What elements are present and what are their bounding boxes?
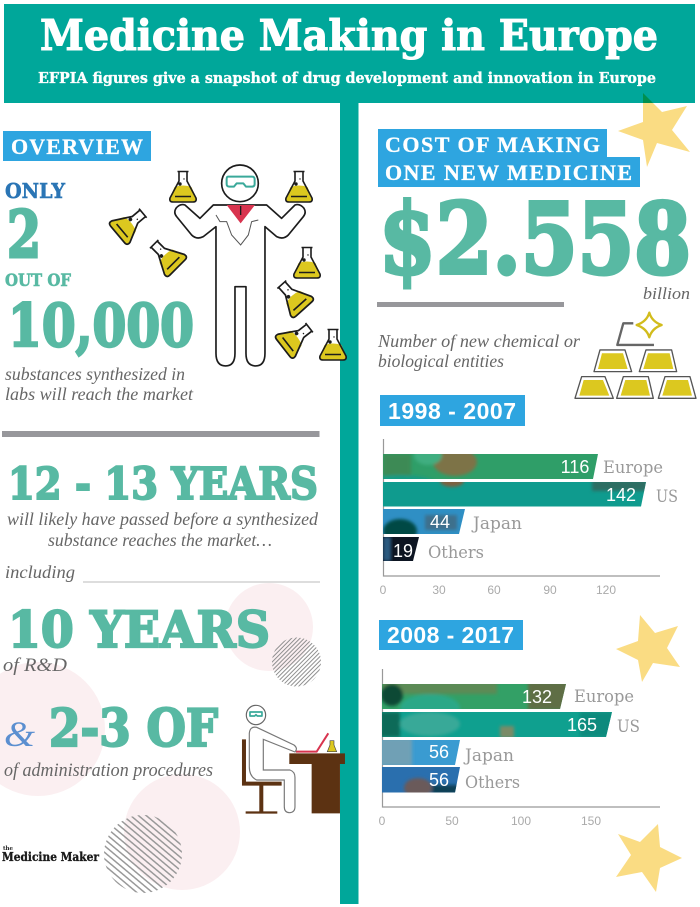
bar Others	[383, 537, 484, 562]
timeline description	[7, 509, 319, 550]
panel: overview	[3, 131, 194, 404]
chart: 1998-2007	[360, 395, 678, 597]
panel: timeline	[3, 459, 320, 781]
hatched circle lower	[104, 815, 182, 893]
axis ticks: 50	[445, 814, 459, 828]
cost heading: COST OF MAKING	[385, 132, 600, 157]
bar Europe: Europe	[574, 687, 634, 706]
axis ticks	[380, 583, 616, 597]
including: including	[5, 562, 75, 582]
bar Europe	[382, 684, 634, 709]
centre divider bar	[340, 100, 358, 904]
entities description: Number of new chemical or	[377, 331, 581, 351]
divider	[2, 431, 320, 437]
2-3 of: 2-3 OF	[49, 699, 218, 759]
icon: gold bars	[575, 313, 696, 398]
number 2: 2	[7, 197, 41, 273]
panel: cost	[377, 129, 696, 398]
axis ticks: 90	[543, 583, 557, 597]
bar Japan: 44	[430, 512, 450, 532]
background decoration: pink circles	[0, 583, 313, 890]
timeline description: will likely have passed before a synthesized	[7, 509, 319, 529]
icon: scientist at desk	[242, 705, 345, 814]
overview description: substances synthesized in	[5, 364, 185, 384]
bar US: 142	[606, 485, 636, 505]
axis ticks: 0	[379, 814, 386, 828]
period label: 1998 - 2007	[388, 398, 516, 424]
logo: The Medicine Maker: Medicine Maker	[2, 850, 100, 864]
12-13 years: 12 - 13 YEARS	[8, 459, 318, 510]
overview description	[5, 364, 194, 404]
bar US: 165	[567, 715, 597, 735]
bar US: US	[617, 717, 640, 736]
bar Europe: Europe	[603, 458, 663, 477]
axis ticks: 150	[581, 814, 601, 828]
star middle right	[616, 615, 680, 682]
entities description: biological entities	[378, 351, 504, 371]
bar Japan	[383, 509, 522, 534]
header banner	[4, 4, 695, 103]
subtitle: EFPIA figures give a snapshot of drug development and innovation in Europe	[38, 69, 656, 87]
period label: 2008 - 2017	[387, 622, 514, 648]
ampersand: &	[4, 714, 35, 754]
hatched circle upper	[272, 638, 321, 686]
bar Europe	[383, 454, 662, 479]
bar Others	[382, 767, 520, 792]
number 10,000: 10,000	[8, 291, 194, 360]
bar Others: 19	[393, 541, 413, 561]
bar Others: Others	[465, 773, 520, 792]
divider	[377, 302, 564, 307]
axes	[384, 439, 660, 576]
administration: of administration procedures	[4, 760, 213, 781]
star bottom right	[616, 824, 682, 892]
logo: The Medicine Maker: the	[3, 846, 14, 852]
axis ticks: 100	[511, 814, 531, 828]
axis ticks: 120	[596, 583, 616, 597]
bar US	[380, 712, 640, 738]
axis ticks	[379, 814, 601, 828]
bar US	[383, 482, 677, 506]
overview heading: OVERVIEW	[11, 134, 143, 159]
scientist body	[175, 165, 305, 366]
axis ticks: 60	[487, 583, 501, 597]
bar Japan: Japan	[471, 514, 522, 533]
axis ticks: 0	[380, 583, 387, 597]
out of: OUT OF	[5, 271, 71, 290]
cost heading: ONE NEW MEDICINE	[385, 160, 632, 185]
bar Europe: 116	[561, 457, 589, 477]
timeline description: substance reaches the market…	[48, 530, 272, 550]
chart: 2008-2017	[379, 620, 660, 828]
of R&D: of R&D	[3, 655, 67, 676]
axes	[382, 669, 660, 807]
flasks	[108, 172, 346, 360]
only: ONLY	[5, 179, 65, 203]
title: Medicine Making in Europe	[40, 11, 658, 60]
bar US: US	[656, 487, 678, 506]
axis ticks: 30	[432, 583, 446, 597]
star top right	[618, 93, 690, 167]
icon: scientist with flasks	[108, 165, 346, 366]
entities description	[377, 331, 581, 371]
bar Japan	[382, 740, 514, 765]
10 years: 10 YEARS	[8, 600, 270, 659]
bar Japan: 56	[429, 742, 449, 762]
bar Japan: Japan	[463, 746, 514, 765]
bar Others: Others	[428, 543, 484, 562]
bar Others: 56	[429, 770, 449, 790]
billion: billion	[643, 284, 690, 303]
overview description: labs will reach the market	[5, 384, 194, 404]
cost heading	[378, 129, 640, 187]
bar Europe: 132	[522, 687, 552, 707]
